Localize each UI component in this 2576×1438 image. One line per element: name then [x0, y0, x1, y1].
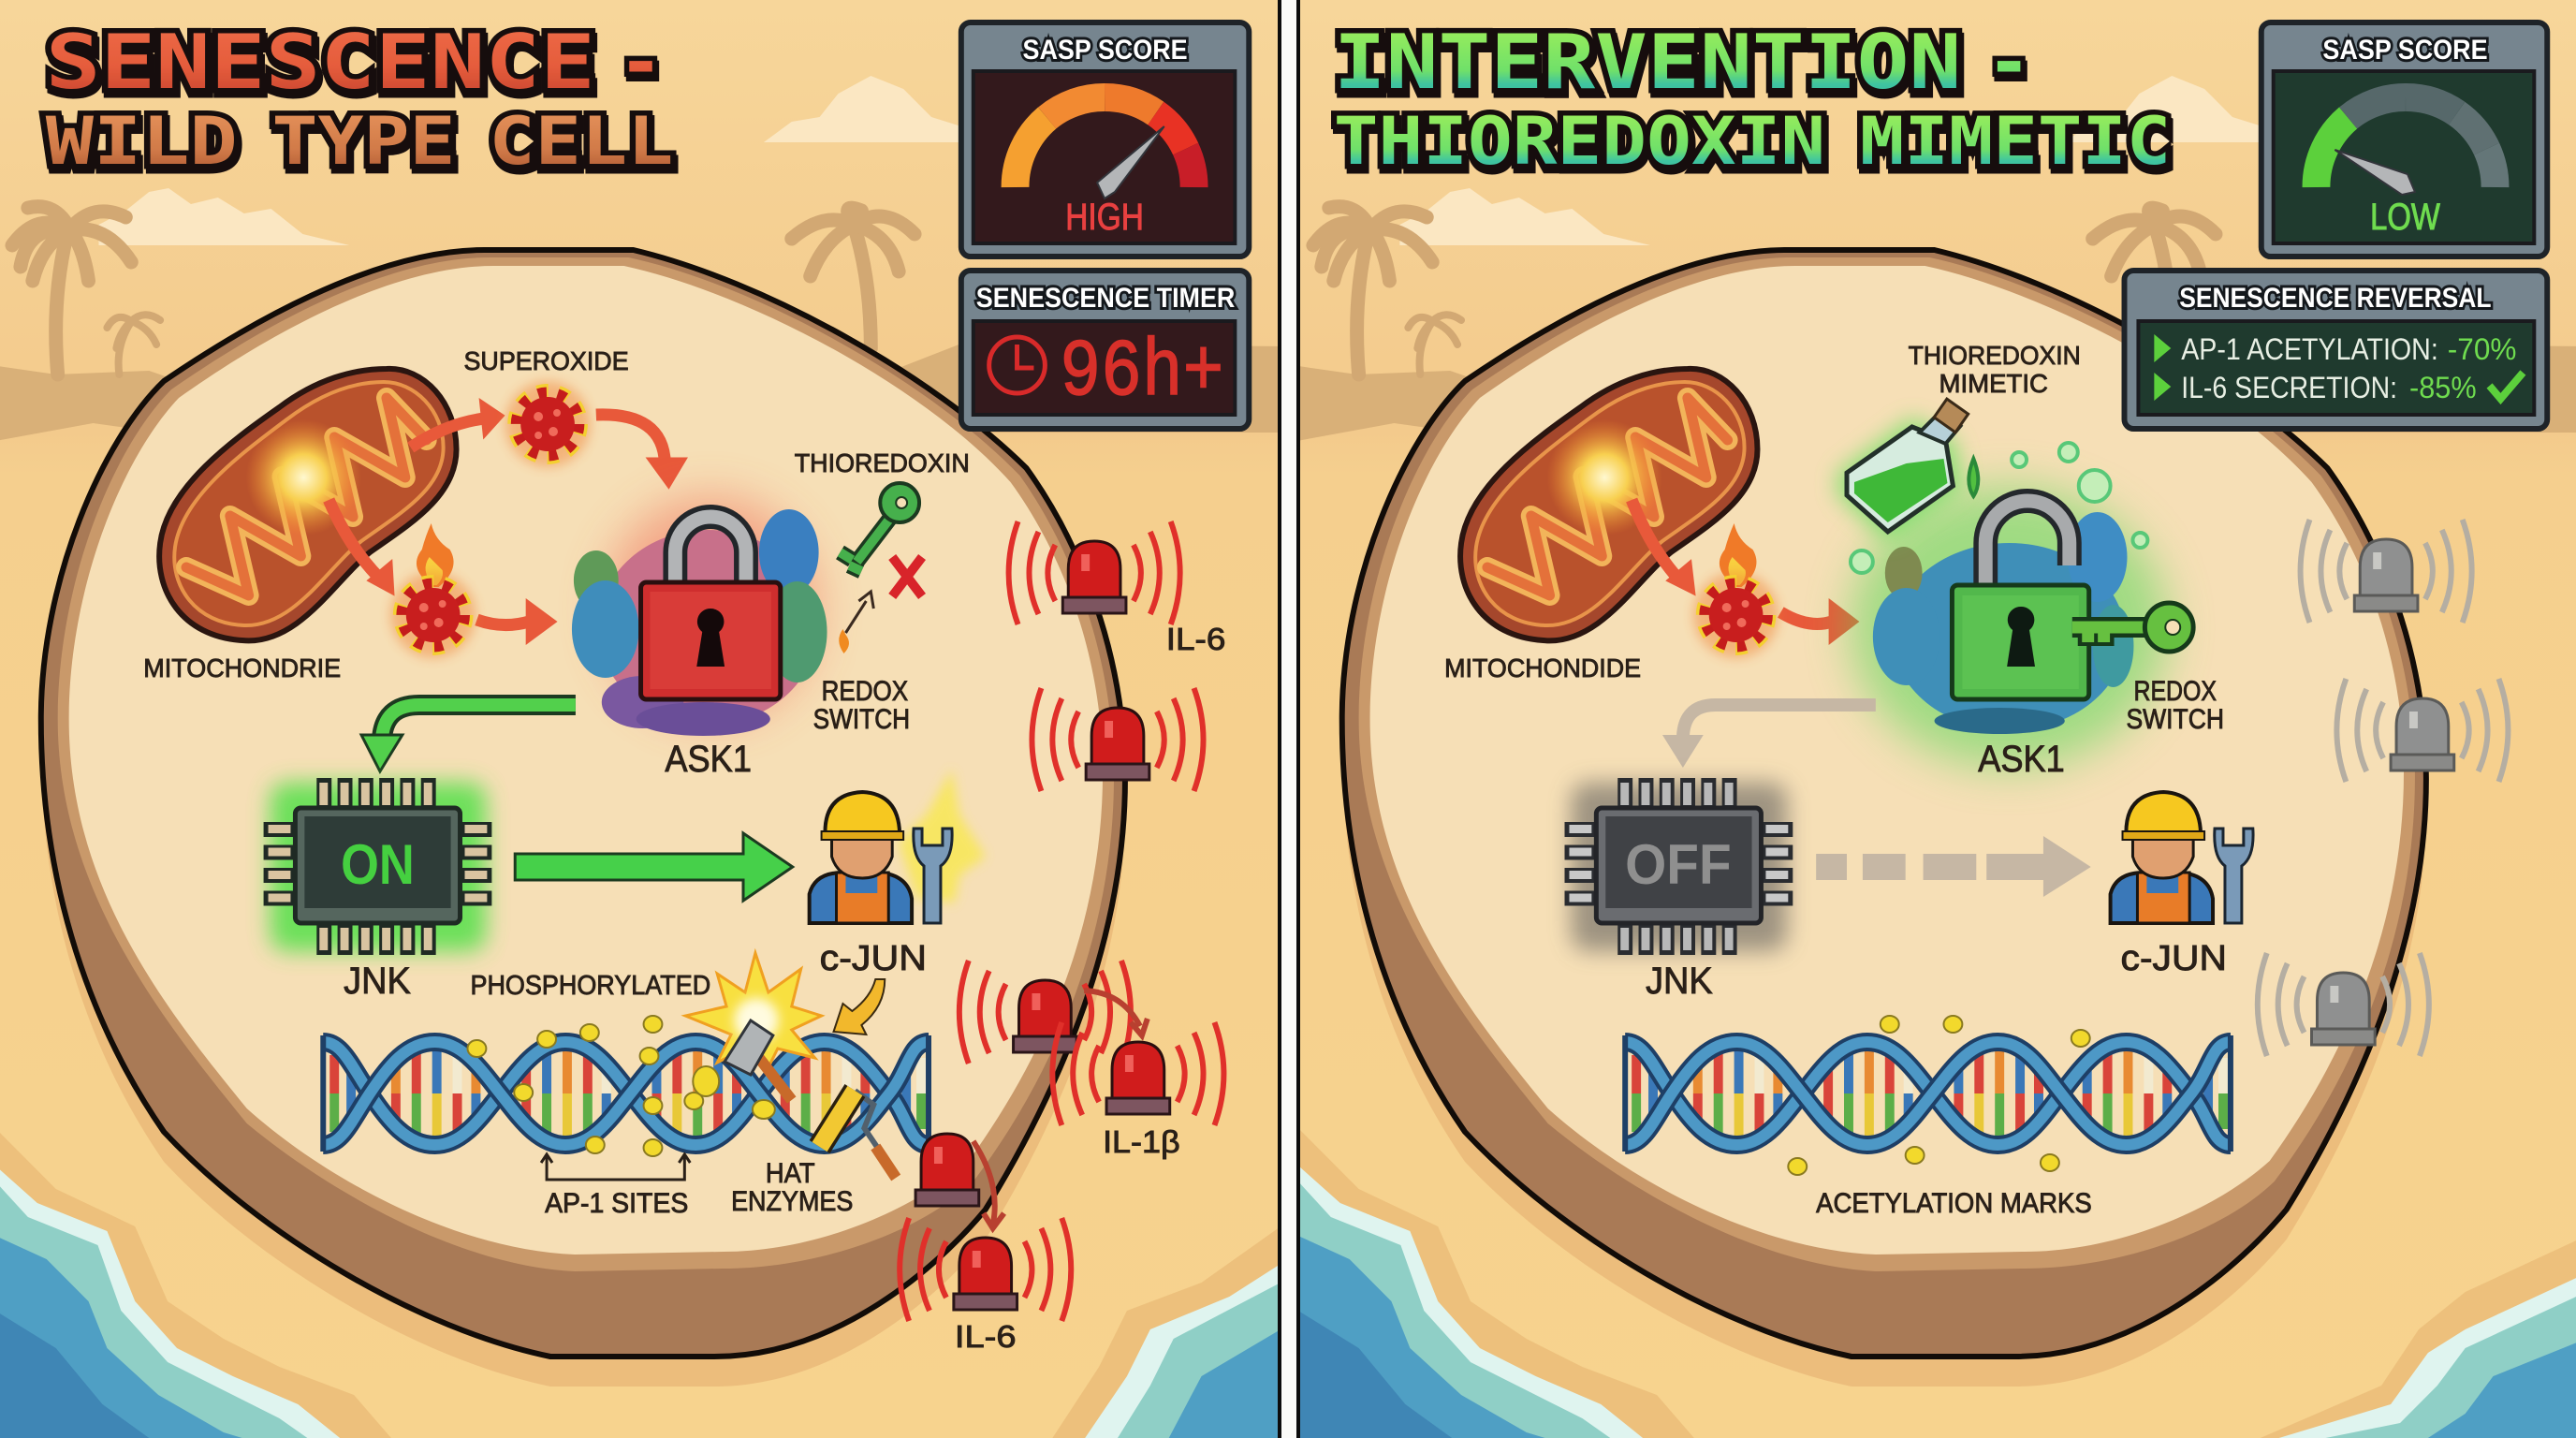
alarm: second: [1032, 688, 1204, 791]
arrow: inactive ASK1 to JNK: [1662, 705, 1876, 768]
label: HAT enzymes: HAT: [766, 1158, 815, 1189]
icon: superoxide upper: [505, 381, 591, 467]
icon: JNK chip off: [1571, 783, 1787, 951]
icon: JNK chip on: [271, 783, 486, 951]
alarm: muted lower: [2258, 953, 2429, 1056]
label: thioredoxin: THIOREDOXIN: [795, 448, 970, 477]
label: JNK: JNK: [1646, 961, 1713, 1002]
panel: wild type cell: [0, 0, 1290, 1438]
arrows: mitochondrion to superoxide: [329, 401, 685, 642]
label: redox switch: REDOX: [2133, 676, 2217, 707]
icon: paint roller HAT: [820, 1091, 896, 1178]
row: AP-1 acetylation: -70%: [2448, 332, 2516, 366]
label: mitochondrie: MITOCHONDRIE: [143, 653, 341, 682]
cell body: [1342, 250, 2426, 1357]
icon: c-JUN worker: [2111, 792, 2253, 923]
bubbles: [1851, 443, 2147, 573]
alarm: muted upper: [2301, 520, 2472, 623]
key: [2072, 627, 2144, 646]
water: bottom left corner: [1298, 1128, 1694, 1438]
title: intervention thioredoxin mimetic: [1334, 19, 2171, 180]
bracket: AP-1 sites: [541, 1154, 690, 1180]
label: phosphorylated: PHOSPHORYLATED: [470, 971, 710, 1001]
label: redox switch: [813, 676, 910, 735]
arrow: dashed inactive: [1816, 836, 2091, 897]
value: HIGH: [1065, 197, 1144, 238]
arrow: c-JUN to DNA: [834, 979, 885, 1034]
title: intervention thioredoxin mimetic: -: [1986, 19, 2031, 106]
icon: DNA helix: [323, 1035, 929, 1152]
alarm: muted middle: [2336, 679, 2508, 782]
title: senescence wild type cell: CELL: [489, 104, 673, 180]
title: intervention thioredoxin mimetic: THIOREDOXIN: [1334, 104, 1825, 180]
label: redox switch: SWITCH: [2126, 704, 2224, 735]
chip state text: ON: [341, 833, 415, 896]
icon: thioredoxin key blocked: [840, 483, 922, 633]
water: bottom left corner: [0, 1128, 391, 1438]
alarm: IL-1 beta: [1052, 1022, 1223, 1125]
icon: mitochondrion: [159, 369, 457, 640]
panel: senescence timer: [961, 271, 1249, 429]
icon: c-JUN worker: [810, 792, 952, 923]
label: ASK1: ASK1: [1978, 739, 2065, 780]
chip state text: OFF: [1625, 833, 1732, 896]
panel: SASP score high: [961, 22, 1249, 257]
heading: SASP SCORE: [1023, 35, 1188, 66]
title: intervention thioredoxin mimetic: MIMETIC: [1860, 104, 2171, 180]
panel: senescence reversal: [2125, 271, 2547, 429]
panel: thioredoxin mimetic intervention: [1292, 0, 2576, 1438]
alarm: third: [959, 961, 1131, 1064]
value: LOW: [2370, 197, 2440, 238]
label: JNK: JNK: [344, 961, 411, 1002]
title: intervention thioredoxin mimetic: INTERVENTION: [1334, 19, 1961, 106]
acetyl marks: [1788, 1016, 2090, 1175]
gauge: [2316, 97, 2496, 187]
value: 96h+: [1060, 328, 1223, 418]
icon: spark behind worker: [899, 770, 986, 902]
row: IL-6 secretion: IL-6 SECRETION:: [2181, 371, 2397, 404]
label: HAT enzymes: [731, 1158, 853, 1217]
water: bottom right corner: [2261, 1236, 2576, 1438]
beach background: [1292, 0, 2576, 1438]
label: superoxide: SUPEROXIDE: [464, 346, 629, 375]
cell body: [41, 250, 1125, 1357]
icon: ASK1 locked padlock: [572, 496, 827, 736]
row: IL-6 secretion: -85%: [2409, 371, 2477, 404]
icon: clock: [989, 337, 1045, 393]
icon: mimetic vial: [1837, 399, 1969, 541]
beach background: [0, 0, 1290, 1438]
heading: SENESCENCE REVERSAL: [2179, 283, 2492, 314]
row: IL-6 secretion: [2154, 371, 2523, 404]
row: AP-1 acetylation: AP-1 ACETYLATION:: [2181, 332, 2438, 366]
alarm: IL-6 lower: [900, 1218, 1071, 1321]
title: senescence wild type cell: -: [619, 19, 663, 106]
alarm: IL-6 upper: [1009, 521, 1180, 624]
label: IL-1 beta: IL-1β: [1103, 1124, 1180, 1159]
arrow: third alarm to IL-1 beta: [1084, 990, 1148, 1035]
divider: [1278, 0, 1300, 1438]
title: senescence wild type cell: WILD: [46, 104, 238, 180]
heading: SENESCENCE TIMER: [976, 283, 1235, 314]
label: redox switch: [2126, 676, 2224, 735]
title: senescence wild type cell: TYPE: [272, 104, 456, 180]
water: bottom right corner: [1052, 1226, 1281, 1438]
gauge: [1016, 97, 1194, 187]
title: senescence wild type cell: SENESCENCE: [46, 19, 595, 106]
label: mitochondide: MITOCHONDIDE: [1444, 653, 1641, 682]
alarm: fifth: [915, 1134, 979, 1206]
spark and small arrow: [845, 592, 873, 633]
icon: superoxide lower with flame: [390, 523, 476, 658]
arrow: JNK to c-JUN: [515, 833, 793, 901]
label: IL-6 lower: IL-6: [955, 1319, 1017, 1354]
cell shadow: [43, 814, 1123, 1387]
label: thioredoxin mimetic: THIOREDOXIN: [1909, 341, 2081, 370]
panel: SASP score low: [2261, 22, 2547, 257]
label: c-JUN: c-JUN: [820, 939, 927, 978]
label: thioredoxin mimetic: [1909, 341, 2081, 398]
icon: superoxide with flame: [1693, 523, 1778, 658]
label: redox switch: REDOX: [822, 676, 908, 707]
label: IL-6 upper: IL-6: [1166, 622, 1225, 656]
icon: red x: [892, 557, 922, 596]
icon: mitochondrion: [1460, 369, 1757, 640]
label: acetylation marks: ACETYLATION MARKS: [1816, 1188, 2092, 1219]
arrow: ASK1 to JNK: [361, 705, 576, 771]
acetyl marks: [467, 1016, 775, 1156]
label: thioredoxin mimetic: MIMETIC: [1939, 369, 2048, 398]
label: AP-1 sites: AP-1 SITES: [545, 1188, 688, 1219]
icon: ASK1 unlocked padlock with key: [1851, 487, 2193, 768]
cell shadow: [1342, 280, 2426, 1387]
arrow: fifth alarm to IL-6: [973, 1141, 1004, 1228]
heading: SASP SCORE: [2322, 35, 2488, 66]
label: ASK1: ASK1: [665, 739, 752, 780]
title: senescence wild type cell: [46, 19, 673, 180]
icon: DNA helix: [1625, 1035, 2231, 1152]
label: HAT enzymes: ENZYMES: [731, 1186, 853, 1217]
icon: spark: [839, 629, 849, 653]
label: c-JUN: c-JUN: [2121, 939, 2227, 978]
label: redox switch: SWITCH: [813, 704, 910, 735]
icon: burst with hammer: [685, 953, 822, 1100]
arrows: mitochondrion to superoxide to ASK1: [1632, 500, 1857, 642]
